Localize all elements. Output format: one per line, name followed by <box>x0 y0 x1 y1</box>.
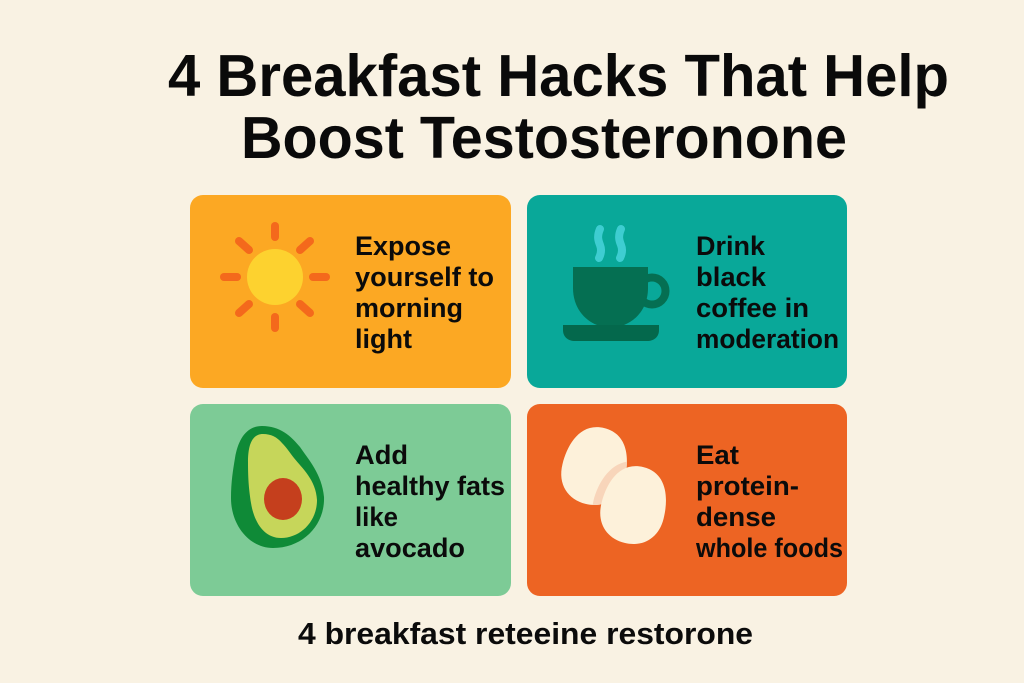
text: healthy fats <box>355 440 505 563</box>
text: morning light <box>355 231 494 354</box>
panel: morning light <box>190 195 511 388</box>
text: whole foods: Eat <box>696 440 739 470</box>
icon: avocado <box>231 426 324 548</box>
panel: black coffee <box>527 195 847 388</box>
text: healthy fats: Add <box>355 440 408 470</box>
panel: healthy fats <box>190 404 511 596</box>
title: 4 Breakfast Hacks That Help <box>168 43 949 109</box>
text: black coffee: Drink <box>696 231 766 261</box>
text: morning light: yourself to <box>355 262 494 292</box>
text: morning light: Expose <box>355 231 451 261</box>
text: black coffee: moderation <box>696 324 839 354</box>
text: healthy fats: healthy fats <box>355 471 505 501</box>
title: Boost Testosteronone <box>241 105 847 171</box>
text: healthy fats: like <box>355 502 398 532</box>
text: whole foods: whole foods <box>695 533 843 563</box>
text: healthy fats: avocado <box>355 533 465 563</box>
icon: coffee cup <box>563 229 666 341</box>
caption: 4 breakfast reteeine restorone <box>298 616 753 651</box>
text: black coffee: coffee in <box>696 293 809 323</box>
text: black coffee <box>696 231 839 354</box>
icon: sun <box>224 226 326 328</box>
text: black coffee: black <box>696 262 767 292</box>
text: morning light: morning <box>355 293 463 323</box>
title <box>168 43 949 171</box>
text: morning light: light <box>355 324 412 354</box>
text: whole foods: protein- <box>696 471 799 501</box>
text: whole foods <box>695 440 843 563</box>
panel: whole foods <box>527 404 847 596</box>
icon: eggs <box>561 427 666 544</box>
text: whole foods: dense <box>696 502 776 532</box>
